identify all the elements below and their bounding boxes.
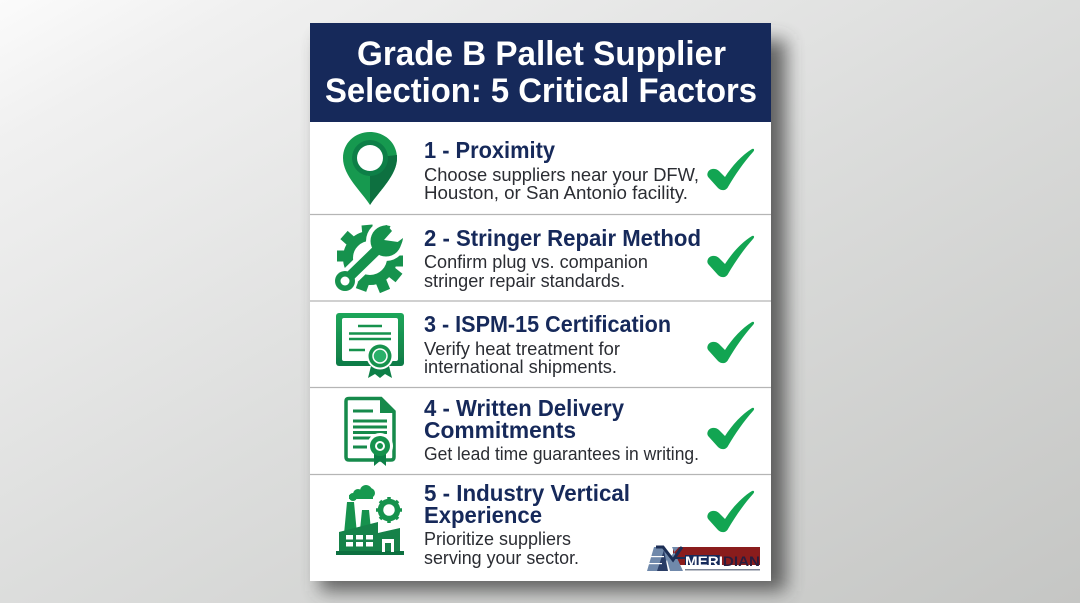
heading 5: Experience	[424, 502, 542, 528]
icon: factory with gear	[336, 485, 404, 555]
header band with title	[310, 23, 771, 122]
description 1: Choose suppliers near your DFW,	[424, 164, 699, 185]
poster panel	[310, 23, 771, 581]
row 5: industry experience	[336, 480, 754, 568]
heading 3: 3 - ISPM-15 Certification	[424, 311, 671, 337]
heading 4	[424, 395, 624, 443]
icon: check mark 4	[707, 408, 754, 449]
description 2: stringer repair standards.	[424, 270, 625, 291]
row 3: ISPM-15	[336, 311, 754, 378]
description 5: Prioritize suppliers	[424, 528, 571, 549]
heading 4: Commitments	[424, 417, 576, 443]
row 1: proximity	[343, 132, 754, 205]
title	[325, 35, 757, 110]
logo: Meridian: MERIDIAN	[685, 553, 760, 569]
title: Selection: 5 Critical Factors	[325, 72, 757, 110]
heading 2: 2 - Stringer Repair Method	[424, 225, 701, 251]
heading 4: 4 - Written Delivery	[424, 395, 624, 421]
description 3: Verify heat treatment for	[424, 338, 620, 359]
heading 5: 5 - Industry Vertical	[424, 480, 630, 506]
row 2: stringer repair	[335, 221, 754, 291]
icon: check mark 5	[707, 491, 754, 532]
icon: check mark 3	[707, 322, 754, 363]
description 4: Get lead time guarantees in writing.	[424, 443, 699, 464]
icon: check mark 1	[707, 149, 754, 190]
description 5: serving your sector.	[424, 547, 579, 568]
description 3	[424, 338, 620, 377]
logo: Meridian	[647, 547, 760, 571]
description 2	[424, 251, 648, 291]
icon: gear and wrench	[335, 221, 410, 291]
icon: map pin	[343, 132, 397, 205]
description 2: Confirm plug vs. companion	[424, 251, 648, 272]
title: Grade B Pallet Supplier	[357, 35, 726, 73]
heading 5	[424, 480, 630, 528]
row 4: delivery commitments	[346, 395, 754, 466]
icon: check mark 2	[707, 236, 754, 277]
heading 1: 1 - Proximity	[424, 137, 555, 163]
description 5	[424, 528, 579, 568]
description 1	[424, 164, 699, 203]
icon: certificate	[336, 313, 404, 378]
description 1: Houston, or San Antonio facility.	[424, 182, 688, 203]
icon: document with seal	[346, 398, 395, 466]
description 3: international shipments.	[424, 356, 617, 377]
